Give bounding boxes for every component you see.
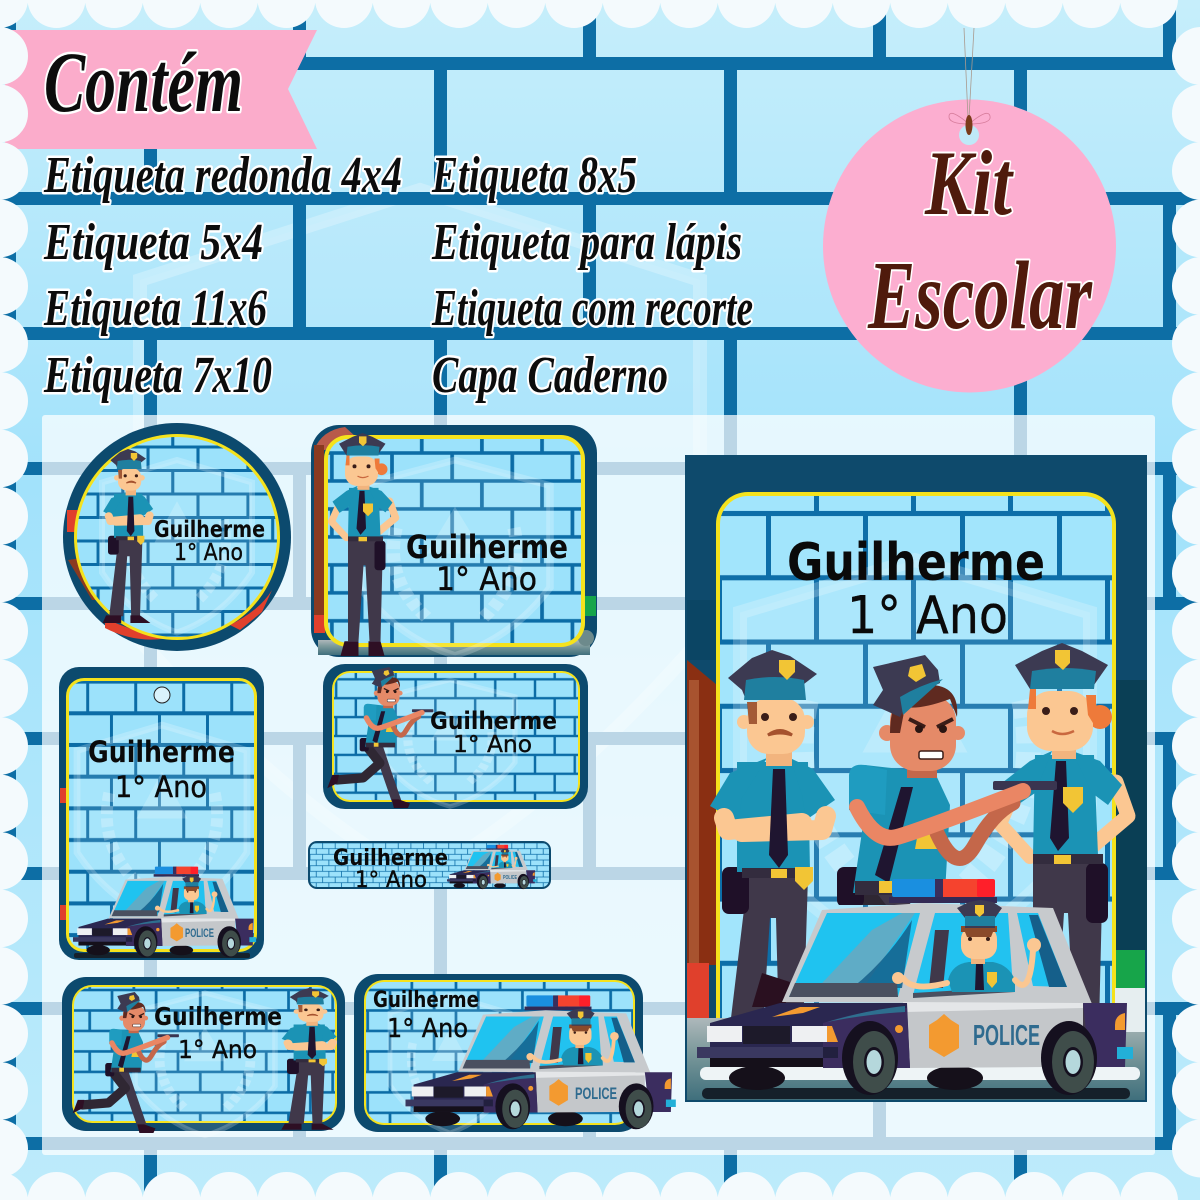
list item: Etiqueta para lápis: [431, 214, 742, 271]
police car: [447, 845, 536, 889]
name: Guilherme: [787, 533, 1045, 593]
red cone: [687, 963, 709, 1018]
grade: 1° Ano: [115, 770, 207, 804]
grade: 1° Ano: [387, 1014, 468, 1044]
list item: Etiqueta redonda 4x4: [43, 147, 402, 204]
name: Guilherme: [88, 735, 235, 769]
pale content panel: [42, 415, 1155, 1155]
contents list: [43, 147, 753, 404]
name: Guilherme: [430, 707, 557, 735]
grade: 1° Ano: [178, 1035, 257, 1064]
grade: 1° Ano: [847, 586, 1008, 646]
notebook cover: [685, 455, 1147, 1102]
list item: Capa Caderno: [432, 347, 668, 404]
grade: 1° Ano: [453, 732, 532, 758]
car text: POLICE: [185, 926, 214, 940]
title ribbon: [5, 30, 317, 149]
green block at right: [1115, 950, 1145, 988]
tag text: Kit: Kit: [924, 132, 1014, 234]
police car: [697, 879, 1133, 1095]
officer with moustache: [710, 650, 836, 1017]
running officer with gun: [327, 667, 433, 808]
name: Guilherme: [406, 528, 568, 566]
title: Contém: Contém: [44, 34, 243, 130]
label: 7x10 tag with car: [59, 667, 264, 960]
punched hole: [154, 687, 170, 703]
dark shoe behind car: [752, 973, 790, 1007]
grade: 1° Ano: [436, 560, 537, 598]
woman officer: [1000, 643, 1128, 1098]
tag text: Escolar: Escolar: [867, 242, 1093, 350]
police car: [406, 995, 676, 1129]
woman officer: [332, 433, 396, 656]
tag: Kit Escolar: [823, 28, 1116, 392]
list item: Etiqueta 5x4: [43, 214, 263, 271]
name: Guilherme: [154, 1002, 282, 1031]
ground: [687, 1018, 1145, 1100]
label: 11x6 with two officers: [62, 977, 345, 1136]
name: Guilherme: [333, 846, 448, 871]
name: Guilherme: [373, 988, 479, 1013]
car text: POLICE: [503, 875, 517, 881]
list item: Etiqueta 8x5: [431, 147, 637, 204]
officer with crossed arms: [103, 449, 153, 623]
car text: POLICE: [973, 1020, 1040, 1052]
grade: 1° Ano: [355, 868, 427, 893]
label: round 4x4: [63, 423, 291, 651]
list item: Etiqueta 7x10: [43, 347, 272, 404]
label: die-cut with car: [354, 974, 676, 1133]
building at left: [687, 660, 717, 965]
label: 8x5 with running officer: [323, 664, 588, 809]
label: 5x4 with woman officer: [311, 425, 597, 657]
angry officer pointing gun: [837, 655, 1057, 905]
list item: Etiqueta 11x6: [43, 280, 267, 337]
list item: Etiqueta com recorte: [431, 280, 753, 337]
label: pencil strip: [308, 841, 551, 893]
officer with crossed arms: [281, 988, 337, 1130]
running officer with gun: [73, 992, 179, 1133]
ground bar: [74, 953, 250, 958]
car text: POLICE: [575, 1084, 617, 1103]
grade: 1° Ano: [174, 540, 243, 566]
name: Guilherme: [154, 517, 265, 543]
police car: [73, 867, 256, 957]
